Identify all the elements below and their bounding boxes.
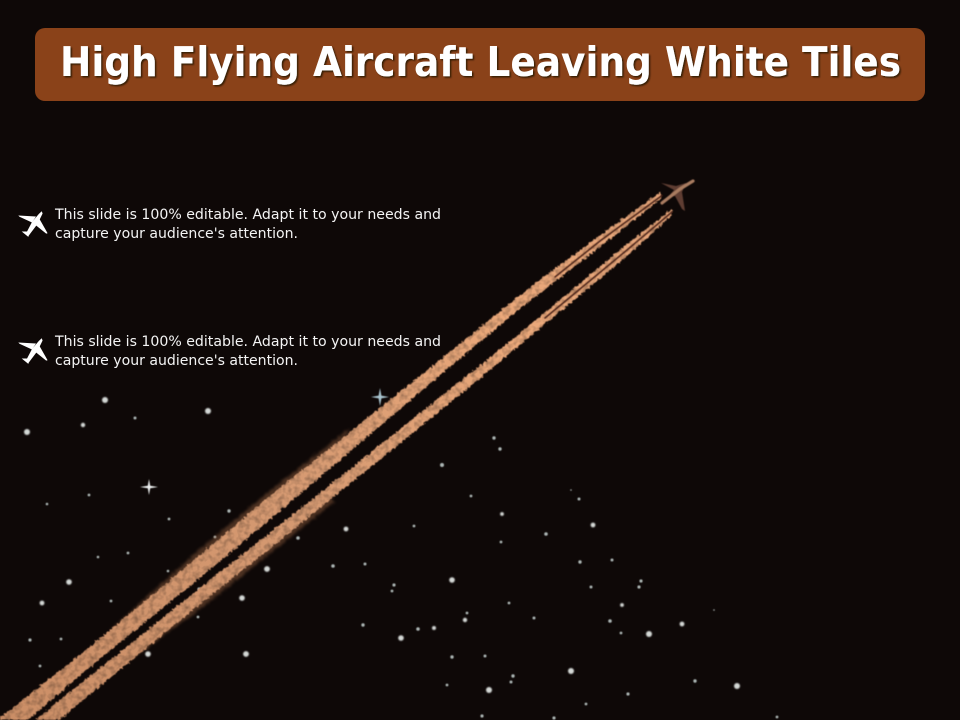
bullet item 1 (18, 207, 441, 242)
text block: capture your audience's attention. (55, 226, 298, 242)
title banner (35, 28, 925, 101)
text block: This slide is 100% editable. Adapt it to your needs and (54, 207, 441, 223)
sparkle star: blue (371, 388, 389, 406)
aircraft (661, 181, 693, 211)
sparkle star: white (140, 479, 158, 495)
text block: This slide is 100% editable. Adapt it to your needs and (54, 334, 441, 350)
contrail: lower (35, 209, 672, 720)
contrail: upper (0, 192, 661, 720)
fuselage (662, 181, 693, 203)
star field: faint stars (28, 416, 778, 720)
star field: bright stars (24, 397, 740, 693)
icon: airplane (18, 338, 48, 364)
wings (661, 183, 686, 211)
bullet item 2 (18, 334, 441, 369)
contrails (0, 192, 672, 720)
icon: airplane (18, 211, 48, 237)
title: High Flying Aircraft Leaving White Tiles (60, 38, 901, 86)
text block: capture your audience's attention. (55, 353, 298, 369)
contrail haze (110, 428, 350, 664)
engine trail gaps near aircraft (545, 196, 672, 318)
